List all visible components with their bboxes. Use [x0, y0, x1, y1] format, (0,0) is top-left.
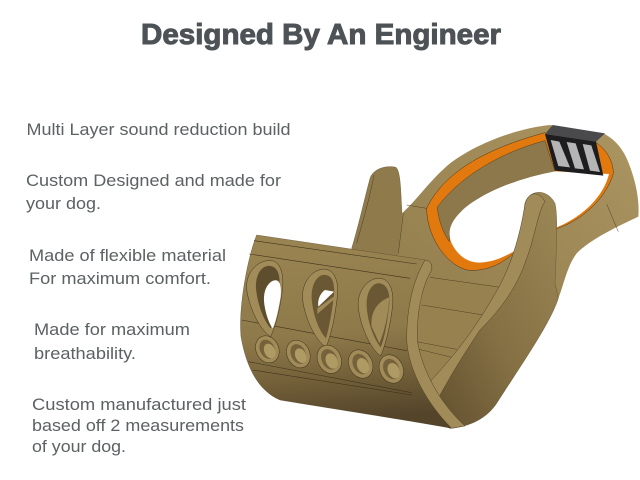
- panel lines: [242, 241, 417, 395]
- black clip: [545, 125, 605, 176]
- breathing hole four: [344, 346, 377, 382]
- feature: custom manufactured line two: based off 2 measurements: [32, 416, 244, 435]
- right side wall: [429, 192, 558, 428]
- ring opening: [450, 171, 609, 263]
- muzzle 3D model: [240, 125, 639, 428]
- vent slot three: [358, 278, 393, 356]
- slot rim: [246, 260, 283, 337]
- breathing hole two: [282, 336, 315, 372]
- vent slot two: [302, 269, 338, 347]
- feature list: [26, 120, 290, 456]
- slot rim: [302, 269, 338, 347]
- feature: flexible material: Made of flexible material: [29, 246, 226, 265]
- feature: custom designed line two: your dog.: [26, 194, 101, 213]
- slot interior: [371, 297, 389, 343]
- feature: custom manufactured line three: of your dog.: [32, 437, 126, 456]
- feature: breathability line one: Made for maximum: [34, 320, 190, 339]
- feature: comfort: For maximum comfort.: [29, 269, 211, 288]
- feature: sound reduction: Multi Layer sound reduction build: [26, 120, 290, 139]
- clip slot one: [551, 140, 570, 167]
- clip top face: [545, 125, 605, 142]
- rear fin: [352, 167, 410, 270]
- vent slot one: [246, 260, 283, 337]
- breathing hole five: [375, 351, 408, 387]
- slot opening: [312, 275, 334, 338]
- clip front face: [545, 134, 603, 176]
- feature: breathability line two: breathability.: [34, 344, 136, 363]
- slot see-through: [264, 280, 281, 328]
- feature: custom designed line one: Custom Designed and made for: [26, 171, 281, 190]
- muzzle floor interior: [410, 252, 530, 397]
- front panel edge: [407, 260, 465, 428]
- orange liner: [427, 133, 613, 270]
- slot see-through: [318, 290, 334, 307]
- breathing hole three: [313, 341, 346, 378]
- slot opening: [367, 283, 389, 347]
- clip slot two: [567, 142, 584, 169]
- feature: custom manufactured line one: Custom manufactured just: [32, 395, 246, 414]
- clip slot three: [583, 144, 600, 172]
- front panel: [240, 235, 452, 428]
- slot rim: [358, 278, 393, 356]
- inner wall of ring: [437, 141, 555, 242]
- right wall rim: [430, 194, 545, 398]
- breathing hole one: [251, 332, 284, 367]
- title: Designed By An Engineer: [141, 19, 501, 51]
- ring band and rear body: [397, 125, 639, 323]
- slot opening: [256, 266, 280, 328]
